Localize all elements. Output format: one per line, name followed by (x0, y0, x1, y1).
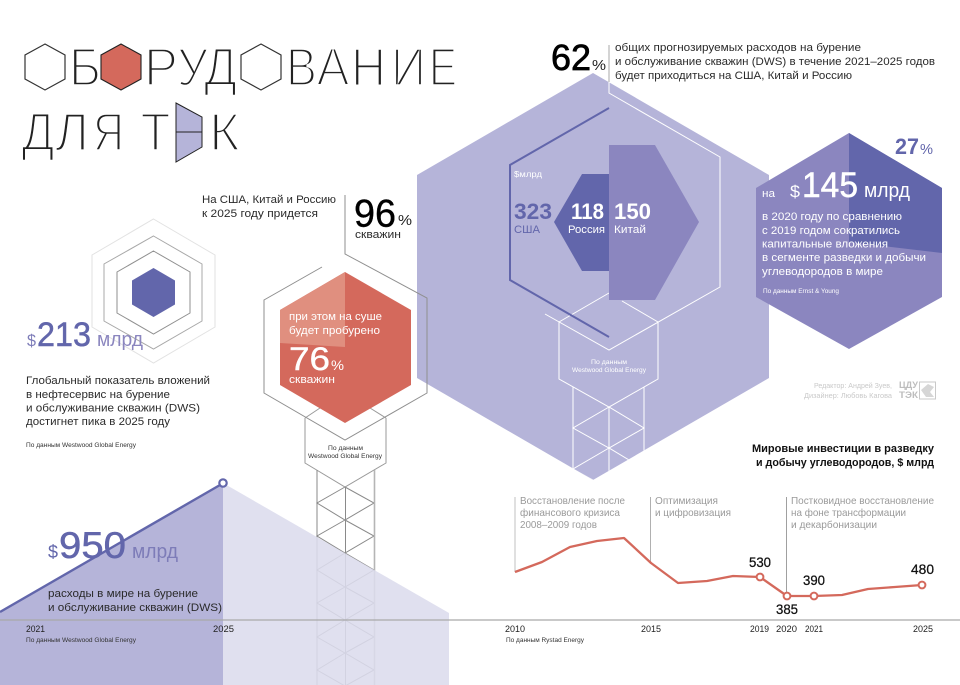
logo: ЦДУ (899, 380, 918, 390)
value labels: 530 (749, 555, 771, 570)
145 description: в 2020 году по сравнению (762, 211, 902, 223)
145 description: углеводородов в мире (762, 266, 883, 278)
year labels: 2025 (913, 624, 933, 634)
chart title (752, 443, 935, 469)
145 value: на (762, 188, 776, 200)
line series (515, 538, 922, 596)
credits: Редактор: Андрей Зуев, (814, 381, 892, 390)
tower source: По данным (328, 445, 363, 452)
period one: финансового кризиса (520, 507, 620, 519)
stat: 62 percent: % (592, 57, 606, 74)
area 2021-2025 (0, 483, 223, 685)
title line one: Е (429, 38, 457, 98)
China value: Китай (614, 224, 646, 236)
213 value: 213 (37, 316, 91, 354)
title line one: Р (144, 38, 178, 98)
title line one: Д (204, 38, 237, 98)
dark quadrant (849, 133, 942, 253)
year labels (505, 624, 933, 634)
title (22, 38, 457, 162)
baseline axis (0, 619, 960, 621)
145 value (762, 166, 910, 205)
logo (899, 380, 936, 400)
USA value (514, 199, 552, 236)
China value (614, 199, 651, 236)
145 description: в сегменте разведки и добычи (762, 252, 926, 264)
145 value: $ (790, 182, 801, 201)
Russia value: 118 (571, 199, 604, 224)
title line two: Я (93, 102, 124, 162)
title line two: К (209, 102, 241, 162)
213 value: млрд (97, 329, 143, 351)
Russia value (568, 199, 605, 236)
period three: Постковидное восстановление (791, 496, 934, 507)
62 percent description: будет приходиться на США, Китай и Россию (615, 70, 852, 82)
value labels: 385 (776, 602, 798, 617)
chart title: и добычу углеводородов, $ млрд (756, 457, 934, 469)
concentric hexagons icon (92, 219, 215, 363)
950 value: млрд (132, 541, 178, 563)
panel: area chart 950 billion (0, 479, 449, 685)
period two (650, 496, 731, 563)
year labels: 2010 (505, 624, 525, 634)
96 percent intro text: к 2025 году придется (202, 208, 318, 220)
period two: и цифровизация (655, 507, 731, 519)
source in tower (572, 359, 647, 374)
145 description: с 2019 годом сократились (762, 225, 900, 237)
source in tower: По данным (591, 359, 627, 366)
213 description: и обслуживание скважин (DWS) (26, 402, 200, 414)
white hexagon outline (545, 82, 720, 350)
96 percent value: скважин (355, 229, 401, 241)
title line two (22, 102, 241, 162)
logo: ТЭК (899, 390, 919, 400)
panel: big hexagon USA China Russia (417, 73, 769, 490)
red hexagon text: будет пробурено (289, 325, 380, 337)
area chart axis labels: По данным Westwood Global Energy (26, 637, 137, 644)
panel: line chart investments (505, 443, 935, 644)
tower lattice (317, 470, 374, 685)
Russia half hexagon (554, 174, 609, 271)
area chart axis labels: 2025 (213, 624, 234, 634)
tower source (308, 445, 383, 460)
chart title: Мировые инвестиции в разведку (752, 443, 935, 455)
USA value: США (514, 224, 541, 236)
panel: 96 percent wells tower (202, 192, 427, 685)
27 percent (895, 134, 933, 159)
source: По данным Rystad Energy (506, 637, 585, 644)
tower hexagon outline (559, 293, 658, 407)
period one: 2008–2009 годов (520, 520, 597, 531)
145 description: капитальные вложения (762, 238, 888, 250)
145 description (762, 211, 926, 278)
title line one: У (177, 38, 209, 98)
62 percent description: и обслуживание скважин (DWS) в течение 2021–2025 годов (615, 56, 935, 68)
markers (757, 574, 925, 599)
213 description (26, 375, 210, 428)
title line two: Л (55, 102, 89, 162)
213 value (27, 316, 143, 354)
area chart axis labels: 2021 (26, 624, 45, 634)
source in tower: Westwood Global Energy (572, 367, 647, 374)
source: По данным Westwood Global Energy (26, 442, 137, 449)
950 value: $ (48, 542, 58, 562)
96 percent value (354, 192, 412, 241)
title line one: Б (69, 38, 101, 98)
96 percent intro text (202, 194, 336, 220)
period one: Восстановление после (520, 496, 625, 507)
tower source: Westwood Global Energy (308, 453, 383, 460)
year labels: 2015 (641, 624, 661, 634)
red hexagon (280, 272, 411, 423)
title line two: Т (140, 102, 170, 162)
red hexagon text: % (331, 357, 344, 373)
period one (515, 496, 625, 572)
dark bracket USA (510, 108, 609, 337)
145 value: млрд (864, 180, 910, 202)
unit label: $млрд (514, 170, 542, 179)
panel: 145 billion hexagon (756, 133, 942, 349)
year labels: 2021 (805, 624, 823, 634)
213 value: $ (27, 331, 37, 350)
213 description: Глобальный показатель вложений (26, 375, 210, 387)
period three: и декарбонизации (791, 519, 877, 531)
title line one: И (391, 38, 426, 98)
950 value: 950 (59, 525, 126, 566)
62 percent description: общих прогнозируемых расходов на бурение (615, 42, 861, 54)
950 value (48, 525, 178, 566)
title line one: Н (351, 38, 386, 98)
hexagon background (756, 133, 942, 349)
red hexagon text: скважин (289, 374, 335, 386)
213 description: достигнет пика в 2025 году (26, 416, 171, 428)
96 percent value: % (398, 212, 412, 229)
950 description: и обслуживание скважин (DWS) (48, 602, 222, 614)
China value: 150 (614, 199, 651, 224)
value labels (749, 555, 934, 617)
title line one (25, 38, 457, 98)
credits: Дизайнер: Любовь Кагова (804, 391, 893, 400)
96 percent value: 96 (354, 192, 396, 236)
red hexagon text: 76 (289, 341, 330, 377)
27 percent: % (920, 141, 933, 158)
panel: concentric hexagons 213 billion (26, 219, 215, 449)
red hexagon text (289, 311, 382, 386)
period three (786, 496, 934, 596)
China half hexagon (609, 145, 699, 300)
grey hexagon outline (264, 195, 427, 440)
145 value: 145 (802, 166, 858, 205)
USA value: 323 (514, 199, 552, 224)
year labels: 2020 (776, 624, 797, 634)
tower lattice (573, 387, 644, 490)
red hexagon text: при этом на суше (289, 311, 382, 323)
source: По данным Ernst & Young (763, 288, 839, 295)
period three: на фоне трансформации (791, 507, 906, 519)
stat: 62 percent (551, 37, 935, 82)
light quadrant (280, 272, 345, 347)
96 percent intro text: На США, Китай и Россию (202, 194, 336, 206)
950 description (48, 588, 222, 614)
value labels: 480 (911, 562, 934, 577)
Russia value: Россия (568, 224, 605, 236)
forecast area (223, 483, 449, 685)
62 percent description (615, 42, 935, 82)
end marker (219, 479, 227, 487)
value labels: 390 (803, 573, 825, 588)
area chart axis labels (26, 624, 234, 644)
period two: Оптимизация (655, 496, 718, 507)
950 description: расходы в мире на бурение (48, 588, 198, 600)
title line two: Д (22, 102, 54, 162)
title line one: В (286, 38, 317, 98)
27 percent: 27 (895, 134, 919, 159)
year labels: 2019 (750, 624, 769, 634)
stat: 62 percent: 62 (551, 37, 591, 78)
213 description: в нефтесервис на бурение (26, 389, 170, 401)
big hexagon background (417, 73, 769, 480)
credits (804, 380, 936, 400)
trend line (0, 485, 220, 612)
title line one: А (316, 38, 350, 98)
tower head outline (305, 408, 386, 487)
